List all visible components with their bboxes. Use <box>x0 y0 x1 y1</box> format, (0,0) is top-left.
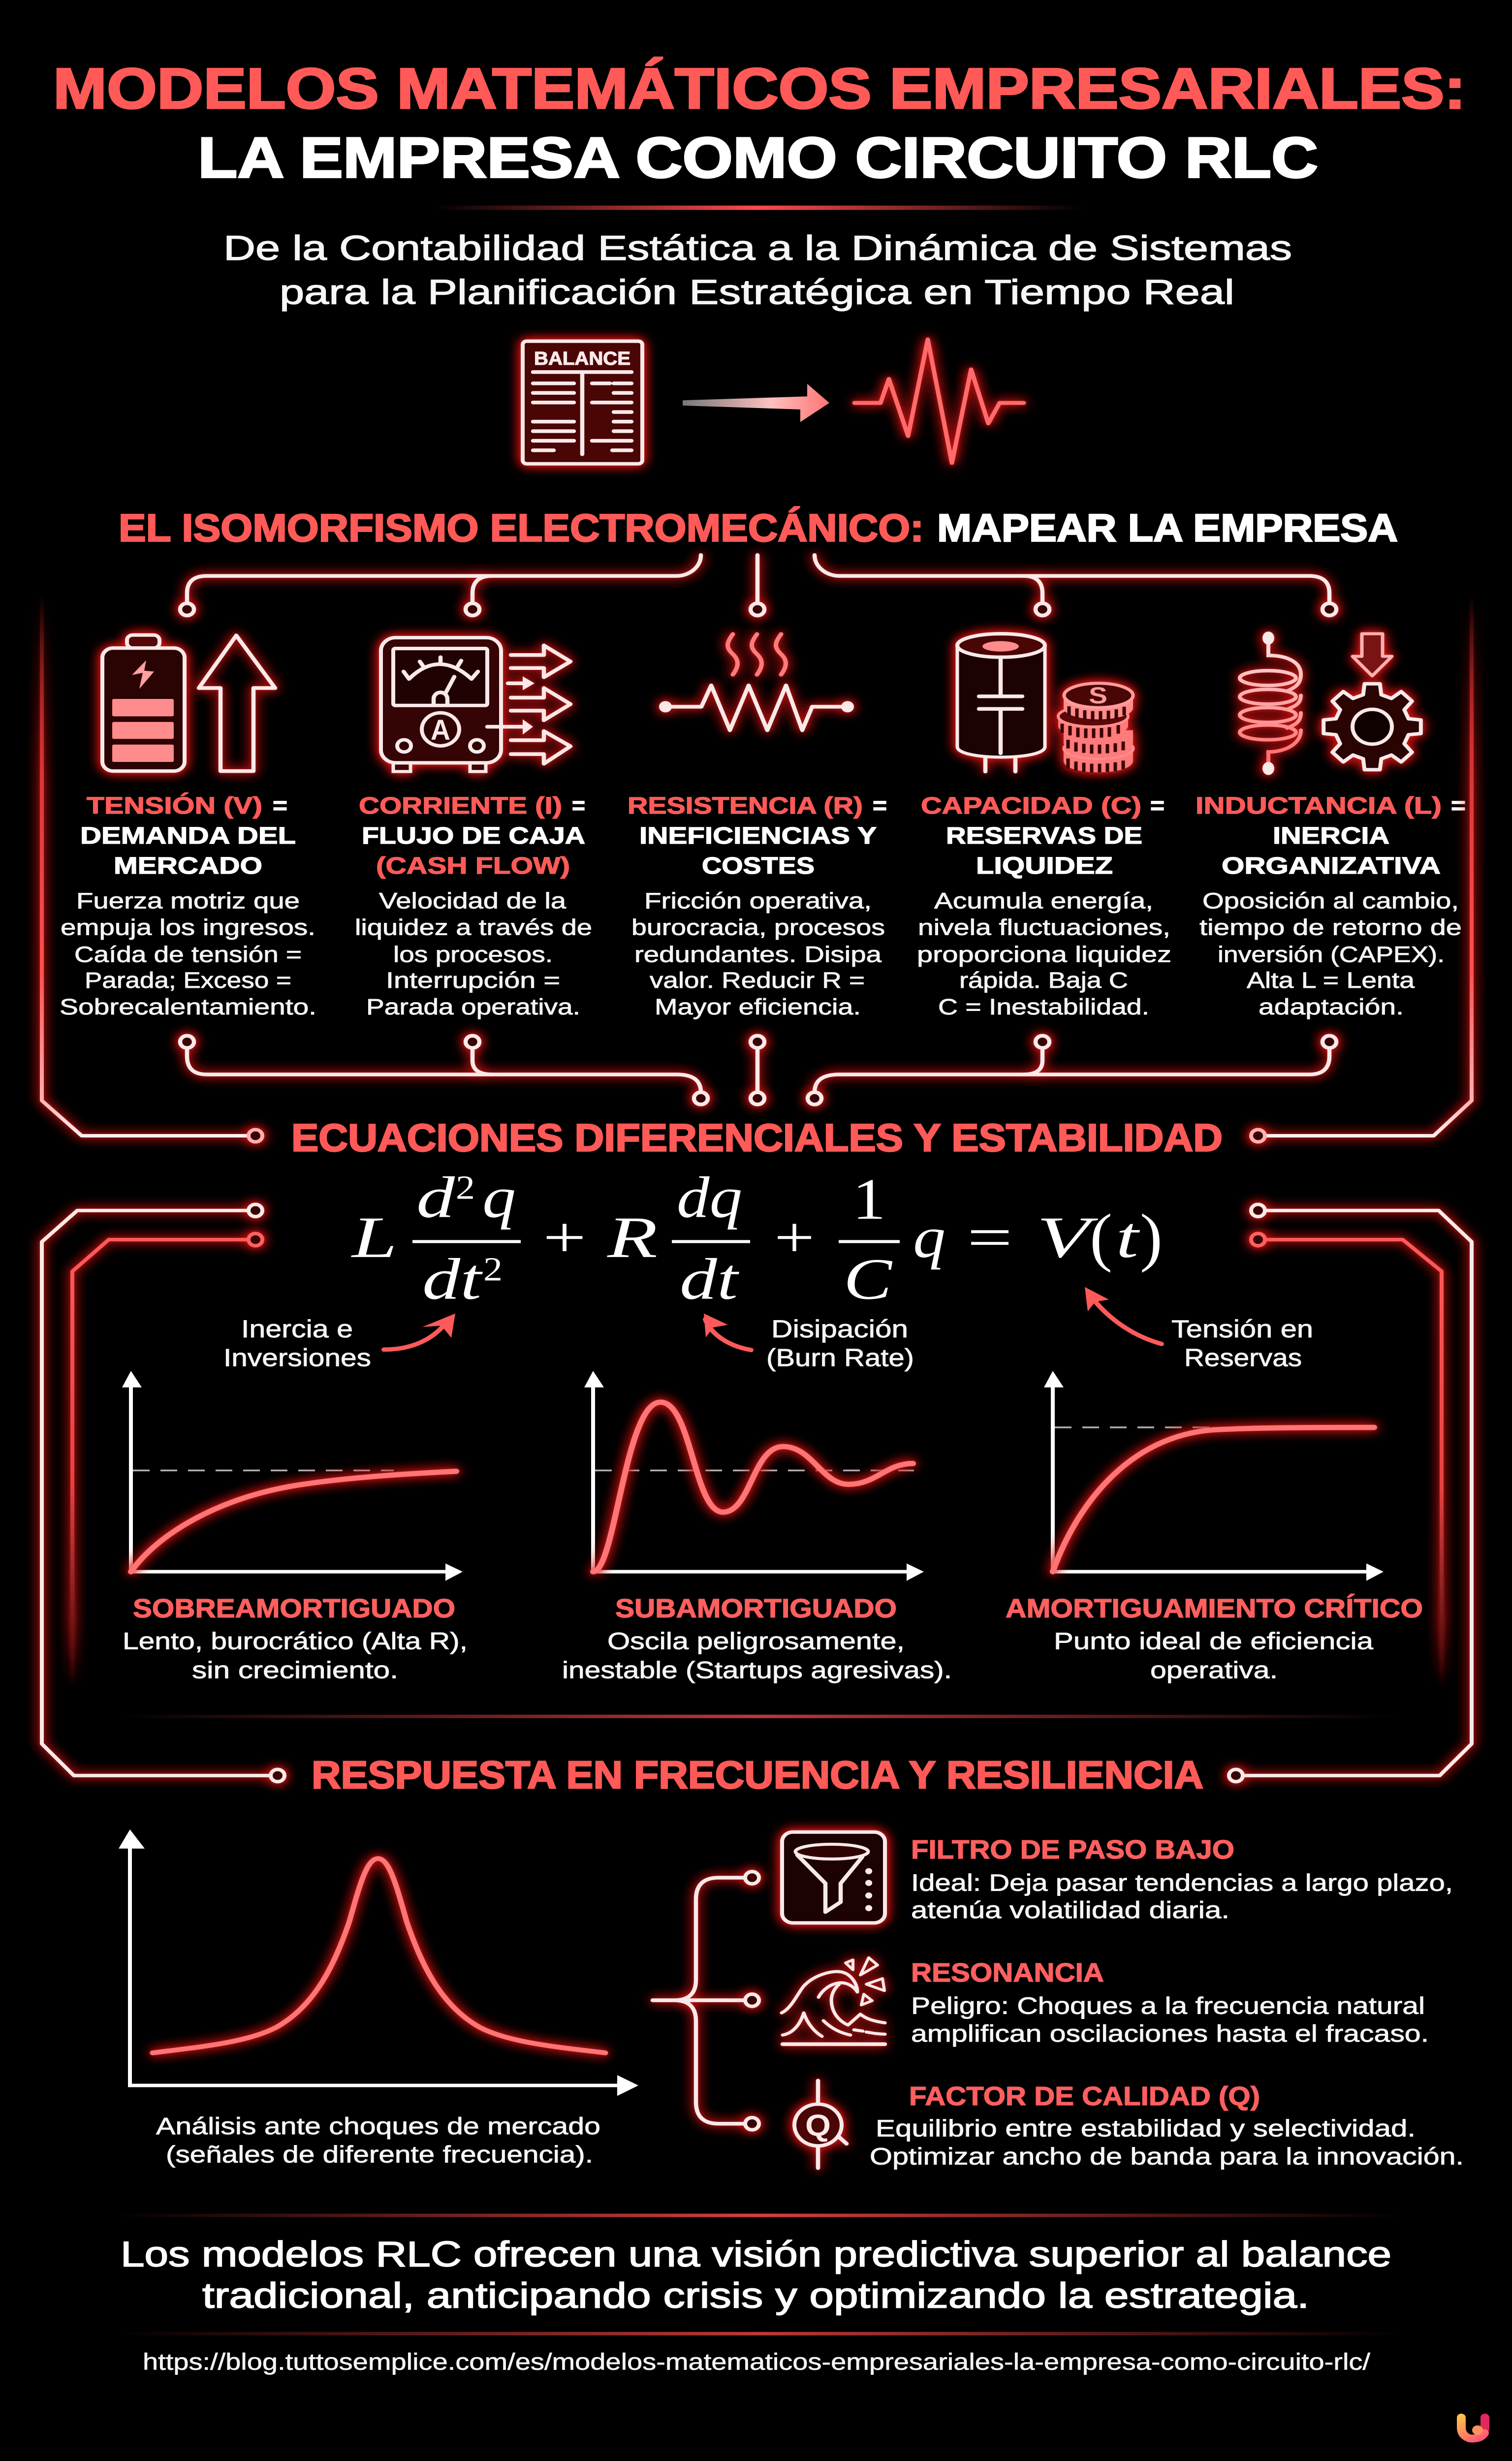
text: subamortiguado: SUBAMORTIGUADO <box>615 1594 897 1623</box>
heading: inductancia: INERCIA <box>1273 822 1389 849</box>
source url: https://blog.tuttosemplice.com/es/modelos-matematicos-empresariales-la-empresa-como-circuito-rlc/ <box>143 2348 1371 2375</box>
conclusion: tradicional, anticipando crisis y optimizando la estrategia. <box>202 2276 1309 2315</box>
heading: isomorfismo: EL ISOMORFISMO ELECTROMECÁNICO: <box>119 506 924 549</box>
equation: d <box>416 1165 455 1230</box>
equation: R <box>607 1205 658 1270</box>
text: resonancia <box>911 1958 1429 2047</box>
heading: tensión: TENSIÓN (V) <box>87 792 262 819</box>
text: amortiguamiento crítico: operativa. <box>1150 1657 1278 1683</box>
heading: inductancia: ORGANIZATIVA <box>1222 852 1441 879</box>
heading: corriente: FLUJO DE CAJA <box>362 822 585 849</box>
title: MODELOS MATEMÁTICOS EMPRESARIALES: <box>53 57 1466 121</box>
text: chart caption: Análisis ante choques de mercado <box>156 2113 600 2139</box>
equation <box>350 1165 1163 1312</box>
callout: tensión en reservas <box>1085 1287 1313 1372</box>
heading: resistencia: RESISTENCIA (R) <box>628 792 863 819</box>
heading: tensión: = <box>273 792 287 819</box>
callout: inercia <box>223 1314 455 1372</box>
panel: inductancia <box>1196 631 1466 1019</box>
heading: tensión: MERCADO <box>114 852 262 879</box>
icon: capacitor and coins: S <box>1089 682 1107 708</box>
equation: q <box>482 1165 516 1230</box>
heading: capacidad: = <box>1150 792 1165 819</box>
text: factor de calidad: FACTOR DE CALIDAD (Q) <box>909 2082 1260 2111</box>
equation: + <box>543 1205 586 1270</box>
icon: balance sheet <box>523 341 642 464</box>
text: corriente: liquidez a través de <box>355 915 592 940</box>
heading: inductancia: INDUCTANCIA (L) <box>1196 792 1442 819</box>
text: tensión: empuja los ingresos. <box>61 915 315 940</box>
callout: disipación: Disipación <box>771 1315 908 1343</box>
equation: ) <box>1140 1200 1163 1273</box>
text: corriente: Interrupción = <box>386 968 560 993</box>
icon: ammeter with flow arrows <box>381 637 570 771</box>
text: capacidad: nivela fluctuaciones, <box>918 915 1170 940</box>
text: inductancia: adaptación. <box>1259 995 1404 1019</box>
text: resonancia: amplifican oscilaciones hasta el fracaso. <box>911 2020 1429 2047</box>
heading: ecuaciones: ECUACIONES DIFERENCIALES Y ESTABILIDAD <box>291 1116 1223 1159</box>
heading: resistencia: INEFICIENCIAS Y <box>639 822 877 849</box>
equation: = <box>967 1205 1012 1270</box>
text: corriente <box>355 888 592 1019</box>
text: factor de calidad <box>870 2082 1464 2170</box>
equation: q <box>913 1205 945 1270</box>
text: inductancia: Oposición al cambio, <box>1202 888 1459 914</box>
heading: isomorfismo: MAPEAR LA EMPRESA <box>937 506 1398 549</box>
text: chart caption: (señales de diferente frecuencia). <box>166 2141 593 2168</box>
heading: isomorfismo <box>119 506 1398 549</box>
heading: resistencia: COSTES <box>702 852 815 879</box>
equation: + <box>774 1205 815 1270</box>
icon: Q factor <box>794 2081 847 2168</box>
text: chart caption <box>156 2113 600 2168</box>
heading: capacidad: RESERVAS DE <box>946 822 1142 849</box>
text: filtro de paso bajo <box>911 1835 1453 1923</box>
text: sobreamortiguado: Lento, burocrático (Alta R), <box>123 1627 468 1654</box>
text: tensión: Fuerza motriz que <box>76 888 300 914</box>
panel: capacidad <box>917 634 1171 1019</box>
text: amortiguamiento crítico: Punto ideal de eficiencia <box>1054 1627 1373 1654</box>
text: capacidad: rápida. Baja C <box>959 968 1128 993</box>
text: resistencia: Fricción operativa, <box>644 888 872 914</box>
subtitle <box>223 228 1292 311</box>
text: capacidad: Acumula energía, <box>934 888 1153 914</box>
text: corriente: Parada operativa. <box>366 995 580 1019</box>
icon: wave resonance <box>782 1957 885 2044</box>
text: amortiguamiento crítico: AMORTIGUAMIENTO CRÍTICO <box>1006 1594 1423 1623</box>
icon: capacitor and coins <box>957 634 1134 772</box>
icon: ammeter with flow arrows: A <box>431 715 450 746</box>
text: resonancia: RESONANCIA <box>911 1958 1104 1988</box>
icon: pulse signal <box>854 340 1024 463</box>
callout: tensión en reservas: Tensión en <box>1171 1315 1313 1343</box>
chart: frequency response <box>119 1830 638 2096</box>
heading: resistencia <box>628 792 887 879</box>
text: tensión: Caída de tensión = <box>74 942 302 967</box>
text: tensión: Parada; Exceso = <box>85 968 291 993</box>
text: filtro de paso bajo: FILTRO DE PASO BAJO <box>911 1835 1234 1864</box>
text: subamortiguado: Oscila peligrosamente, <box>607 1627 905 1654</box>
text: filtro de paso bajo: Ideal: Deja pasar tendencias a largo plazo, <box>911 1869 1453 1896</box>
icon: funnel filter <box>782 1832 885 1923</box>
equation: L <box>350 1205 397 1270</box>
equation: 2 <box>456 1168 475 1206</box>
text: corriente: los procesos. <box>393 942 553 967</box>
equation: dq <box>677 1165 742 1230</box>
text: resistencia: burocracia, procesos <box>631 915 885 940</box>
icon: Q factor: Q <box>805 2108 831 2143</box>
text: resistencia <box>631 888 885 1019</box>
text: filtro de paso bajo: atenúa volatilidad diaria. <box>911 1896 1229 1923</box>
brace connector <box>653 1872 759 2130</box>
callout: tensión en reservas: Reservas <box>1184 1344 1302 1372</box>
heading: corriente: CORRIENTE (I) <box>359 792 562 819</box>
text: inductancia: Alta L = Lenta <box>1247 968 1415 993</box>
icon: balance sheet: BALANCE <box>534 347 630 369</box>
heading: capacidad: CAPACIDAD (C) <box>921 792 1141 819</box>
arrow: balance to signal <box>683 384 829 422</box>
text: resistencia: redundantes. Disipa <box>634 942 882 967</box>
title: LA EMPRESA COMO CIRCUITO RLC <box>198 126 1318 190</box>
heading: resistencia: = <box>873 792 887 819</box>
callout: inercia: Inversiones <box>223 1344 371 1372</box>
conclusion <box>121 2235 1391 2315</box>
text: capacidad <box>917 888 1171 1019</box>
heading: capacidad: LIQUIDEZ <box>976 852 1113 879</box>
text: sobreamortiguado: sin crecimiento. <box>192 1657 398 1683</box>
chart: amortiguamiento crítico <box>1044 1371 1384 1581</box>
text: tensión <box>60 888 316 1019</box>
heading: capacidad <box>921 792 1165 879</box>
icon: battery and up arrow <box>102 635 275 771</box>
title <box>53 57 1466 190</box>
text: inductancia: inversión (CAPEX). <box>1218 942 1445 967</box>
equation: C <box>844 1247 893 1312</box>
heading: tensión: DEMANDA DEL <box>80 822 296 849</box>
chart: subamortiguado <box>584 1371 924 1581</box>
heading: corriente: (CASH FLOW) <box>376 852 570 879</box>
heading: corriente <box>359 792 585 879</box>
text: sobreamortiguado <box>123 1594 468 1683</box>
text: amortiguamiento crítico <box>1006 1594 1423 1683</box>
subtitle: para la Planificación Estratégica en Tiempo Real <box>280 273 1234 311</box>
text: capacidad: proporciona liquidez <box>917 942 1171 967</box>
chart: sobreamortiguado <box>122 1371 463 1581</box>
text: sobreamortiguado: SOBREAMORTIGUADO <box>133 1594 455 1623</box>
equation: t <box>1116 1205 1140 1270</box>
text: factor de calidad: Optimizar ancho de banda para la innovación. <box>870 2143 1464 2170</box>
icon: inductor coil and gear <box>1240 631 1421 775</box>
equation: dt <box>422 1247 483 1312</box>
heading: respuesta en frecuencia: RESPUESTA EN FRECUENCIA Y RESILIENCIA <box>312 1753 1203 1797</box>
heading: corriente: = <box>572 792 585 819</box>
equation: dt <box>680 1247 739 1312</box>
text: factor de calidad: Equilibrio entre estabilidad y selectividad. <box>876 2114 1416 2142</box>
heading: inductancia: = <box>1451 792 1466 819</box>
connectors: top bus <box>180 555 1336 615</box>
callout: disipación: (Burn Rate) <box>766 1344 914 1372</box>
icon: resistor with heat waves <box>659 634 854 730</box>
text: capacidad: C = Inestabilidad. <box>938 995 1149 1019</box>
panel: resistencia <box>628 634 887 1019</box>
callout: inercia: Inercia e <box>241 1315 353 1343</box>
frame: upper circuit traces <box>42 596 1472 1142</box>
equation: 1 <box>852 1167 885 1231</box>
text: inductancia <box>1199 888 1462 1019</box>
heading: inductancia <box>1196 792 1466 879</box>
subtitle: De la Contabilidad Estática a la Dinámica de Sistemas <box>223 228 1292 267</box>
connectors: bottom bus <box>180 1036 1336 1104</box>
text: resistencia: valor. Reducir R = <box>650 968 865 993</box>
equation: ( <box>1090 1200 1112 1273</box>
equation: V <box>1037 1205 1099 1270</box>
text: resistencia: Mayor eficiencia. <box>655 995 861 1019</box>
conclusion: Los modelos RLC ofrecen una visión predictiva superior al balance <box>121 2235 1391 2274</box>
text: resonancia: Peligro: Choques a la frecuencia natural <box>911 1992 1425 2019</box>
panel: corriente <box>355 637 592 1019</box>
logo <box>1461 2418 1485 2438</box>
panel: tensión <box>60 635 316 1019</box>
text: subamortiguado <box>562 1594 952 1683</box>
text: inductancia: tiempo de retorno de <box>1199 915 1462 940</box>
text: subamortiguado: inestable (Startups agresivas). <box>562 1657 952 1683</box>
text: tensión: Sobrecalentamiento. <box>60 995 316 1019</box>
heading: tensión <box>80 792 296 879</box>
text: corriente: Velocidad de la <box>379 888 566 914</box>
frame: red inner traces <box>72 1233 1442 1686</box>
equation: 2 <box>483 1250 503 1288</box>
frame: white outer traces <box>42 1204 1472 1782</box>
callout: disipación <box>704 1314 914 1372</box>
